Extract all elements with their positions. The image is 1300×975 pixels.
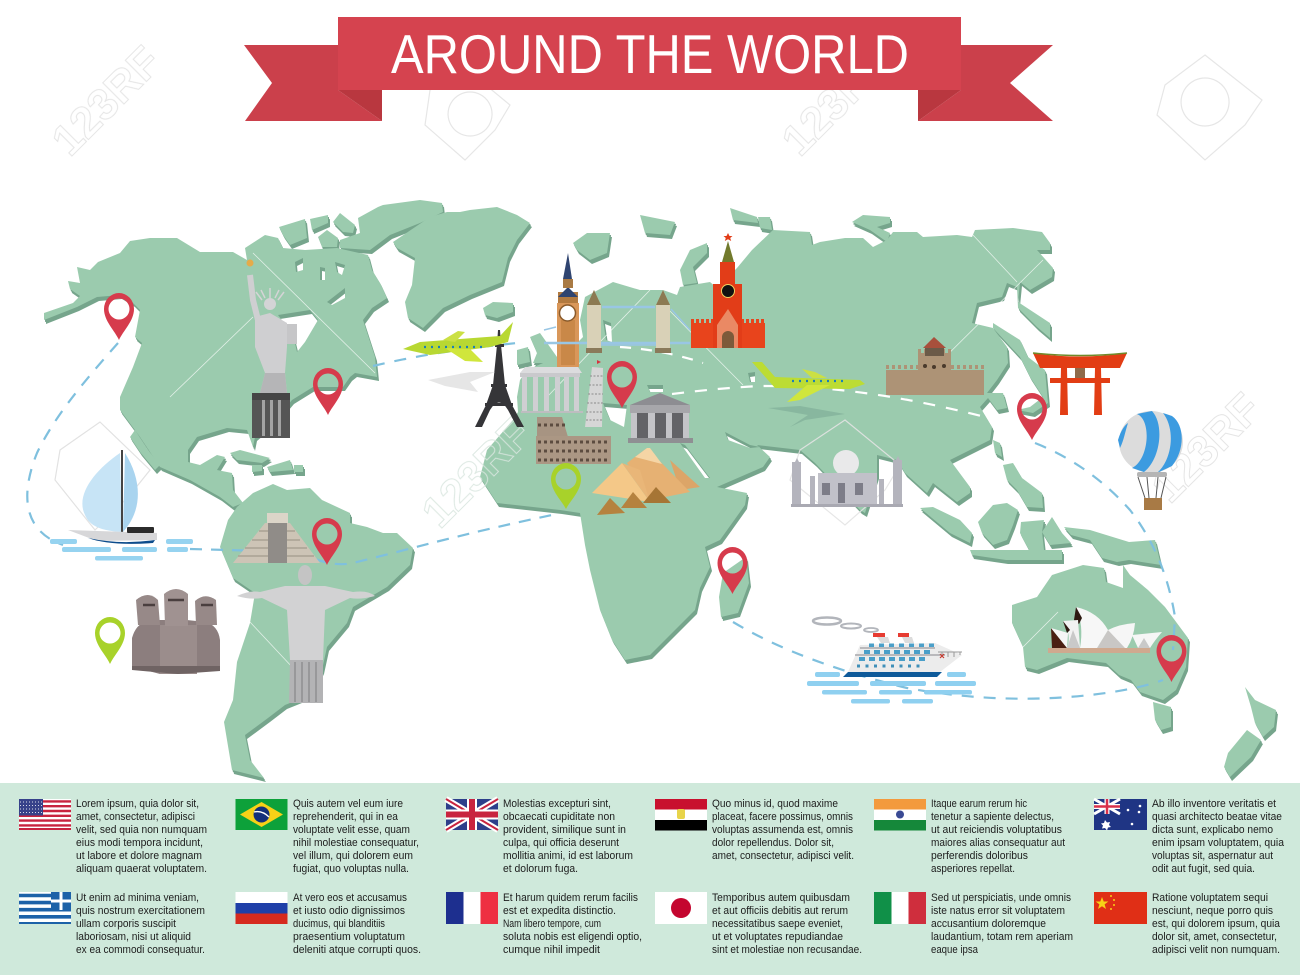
landmark: Greek temple	[628, 393, 693, 443]
text: USA	[76, 798, 207, 875]
text: France: cumque nihil impedit	[503, 944, 600, 956]
text: Australia: odit aut fugit, sed quia.	[1152, 863, 1255, 875]
land: North America	[44, 235, 387, 507]
title text: AROUND THE WORLD	[391, 23, 909, 85]
text: UK: Molestias excepturi sint,	[503, 798, 611, 810]
land: Tasmania	[1153, 702, 1171, 730]
watermarks: 123RF	[772, 37, 900, 165]
cruise ship	[813, 618, 962, 677]
flag: Brazil	[236, 799, 288, 830]
airplane over the Atlantic	[403, 322, 513, 392]
text: Italy: iste natus error sit voluptatem	[931, 905, 1065, 917]
text: USA: eius modi tempora incidunt,	[76, 837, 203, 849]
pin: New York	[313, 368, 343, 415]
text: India	[931, 798, 1065, 875]
land: Iceland	[483, 302, 513, 318]
text: China: est, qui dolorem ipsum, quia	[1152, 918, 1280, 930]
pin: Alaska	[104, 293, 134, 340]
text: China: nesciunt, neque porro quis	[1152, 905, 1273, 917]
pin: Brazil	[312, 518, 342, 565]
land: Indonesia and New Guinea	[920, 503, 1161, 565]
pin: Madagascar	[718, 547, 748, 594]
text: Egypt: amet, consectetur, adipisci velit.	[712, 850, 854, 862]
ribbon main band	[338, 17, 961, 90]
pin: Japan	[1017, 393, 1047, 440]
text: Brazil: nihil molestiae consequatur,	[293, 837, 419, 849]
text: Brazil: Quis autem vel eum iure	[293, 798, 403, 810]
text: Italy	[931, 892, 1073, 956]
text: Japan	[712, 892, 862, 956]
text: Japan: et aut officiis debitis aut rerum	[712, 905, 848, 917]
sailboat	[68, 450, 157, 544]
landmark: Kremlin Spasskaya tower	[691, 233, 765, 348]
text: Brazil: reprehenderit, qui in ea	[293, 811, 398, 823]
text: India: tenetur a sapiente delectus,	[931, 811, 1054, 823]
panel: country descriptions	[0, 783, 1300, 975]
text: Russia: At vero eos et accusamus	[293, 892, 407, 904]
flag: Russia	[236, 892, 288, 924]
landmark: Easter Island moai	[132, 589, 220, 674]
text: Russia: et iusto odio dignissimos	[293, 905, 405, 917]
text: Russia: deleniti atque corrupti quos.	[293, 944, 421, 956]
text: Brazil: fugiat, quo voluptas nulla.	[293, 863, 409, 875]
flag: Australia	[1094, 799, 1147, 830]
text: USA: Lorem ipsum, quia dolor sit,	[76, 798, 199, 810]
flag: Italy	[874, 892, 926, 924]
text: Egypt	[712, 798, 854, 862]
text: Japan: necessitatibus saepe eveniet,	[712, 918, 843, 930]
text: China	[1152, 892, 1280, 956]
land: Africa and Eurasia	[480, 228, 1053, 660]
pin: Easter Island	[95, 617, 125, 664]
landmark: Chichen Itza pyramid	[233, 513, 320, 563]
text: France: Nam libero tempore, cum	[503, 918, 601, 930]
text: Australia: voluptas sit, aspernatur aut	[1152, 850, 1273, 862]
flag: USA	[19, 799, 71, 830]
landmark: Colosseum	[536, 417, 611, 464]
text: Greece: Ut enim ad minima veniam,	[76, 892, 199, 904]
text: Italy: Sed ut perspiciatis, unde omnis	[931, 892, 1071, 904]
text: Australia: Ab illo inventore veritatis et	[1152, 798, 1276, 810]
text: Australia	[1152, 798, 1284, 875]
land: Arctic islands of Eurasia	[573, 208, 890, 285]
flag: Greece	[19, 892, 71, 924]
land: Australia	[1012, 565, 1188, 700]
text: Greece: ullam corporis suscipit	[76, 918, 176, 930]
landmark: Statue of Liberty	[246, 260, 297, 438]
text: Australia: quasi architecto beatae vitae	[1152, 811, 1282, 823]
text: Egypt: dolor repellendus. Dolor sit,	[712, 837, 834, 849]
landmark: Brandenburg Gate	[520, 367, 583, 413]
landmark: Tower Bridge	[544, 290, 690, 353]
pin: West Africa	[551, 463, 581, 509]
text: USA: amet, consectetur, adipisci	[76, 811, 195, 823]
text: China: Ratione voluptatem sequi	[1152, 892, 1268, 904]
route: dashed path sailboat via South America to Africa	[190, 515, 552, 564]
text: France: est et expedita distinctio.	[503, 905, 616, 917]
landmark: Taj Mahal	[791, 450, 903, 507]
route: dashed path Alaska to sailboat	[27, 343, 118, 545]
route: dashed path Japan to Australia	[1035, 443, 1175, 650]
text: UK: et dolorum fuga.	[503, 863, 578, 875]
route: dashed white path across Europe	[620, 347, 703, 363]
text: USA: aliquam quaerat voluptatem.	[76, 863, 207, 875]
landmark: Sydney Opera House	[1048, 607, 1162, 653]
text: Egypt: voluptas assumenda est, omnis	[712, 824, 853, 836]
flag: Egypt	[655, 799, 707, 830]
route: dashed path Madagascar to Australia	[733, 622, 1163, 699]
text: Greece: quis nostrum exercitationem	[76, 905, 205, 917]
watermarks: 123RF	[42, 37, 170, 165]
text: Italy: eaque ipsa	[931, 944, 978, 956]
text: Australia: dicta sunt, explicabo nemo	[1152, 824, 1273, 836]
waves under cruise ship	[807, 672, 976, 704]
text: USA: ut labore et dolore magnam	[76, 850, 202, 862]
text: Brazil: voluptate velit esse, quam	[293, 824, 410, 836]
text: India: perferendis doloribus	[931, 850, 1028, 862]
text: Italy: laudantium, totam rem aperiam	[931, 931, 1073, 943]
waves under sailboat	[50, 539, 193, 560]
airplane over Asia	[752, 362, 865, 427]
land: Arctic islands of Canada	[279, 200, 443, 250]
text: India: asperiores repellat.	[931, 863, 1015, 875]
land: Baja California	[130, 430, 160, 470]
text: Japan: ut et voluptates repudiandae	[712, 931, 843, 943]
text: China: dolor sit, amet, consectetur,	[1152, 931, 1277, 943]
flag: China	[1094, 892, 1147, 924]
text: France: Et harum quidem rerum facilis	[503, 892, 638, 904]
text: Greece: laboriosam, nisi ut aliquid	[76, 931, 191, 943]
text: India: Itaque earum rerum hic	[931, 798, 1028, 810]
landmark: Great Wall of China	[886, 337, 984, 395]
text: UK: mollitia animi, id est laborum	[503, 850, 633, 862]
route: dashed path across the Atlantic	[373, 343, 517, 366]
landmark: pyramids of Giza	[592, 448, 700, 515]
route: dashed white path across Asia	[672, 386, 985, 417]
text: Russia: praesentium voluptatum	[293, 931, 405, 943]
text: Japan: sint et molestiae non recusandae.	[712, 944, 862, 956]
watermarks: 123RF	[1142, 384, 1270, 512]
landmark: torii gate	[1033, 353, 1127, 415]
text: Italy: accusantium doloremque	[931, 918, 1046, 930]
watermarks: 123RF	[412, 409, 540, 537]
flag: UK	[446, 799, 498, 830]
text: Egypt: Quo minus id, quod maxime	[712, 798, 838, 810]
text: Brazil: vel illum, qui dolorem eum	[293, 850, 413, 862]
landmark: Christ the Redeemer	[237, 565, 375, 703]
text: Russia: ducimus, qui blanditiis	[293, 918, 385, 930]
text: Japan: Temporibus autem quibusdam	[712, 892, 850, 904]
land: Greenland	[393, 207, 530, 328]
land: Madagascar	[719, 557, 749, 617]
text: France	[503, 892, 642, 956]
land: South America	[220, 484, 413, 778]
text: Russia	[293, 892, 421, 956]
text: Australia: enim ipsam voluptatem, quia	[1152, 837, 1284, 849]
text: UK	[503, 798, 633, 875]
flag: France	[446, 892, 498, 924]
land: Taiwan and Philippines	[993, 440, 1043, 508]
text: UK: obcaecati cupiditate non	[503, 811, 615, 823]
ribbon right tail	[918, 45, 1053, 121]
text: France: soluta nobis est eligendi optio,	[503, 931, 642, 943]
pin: Australia	[1156, 635, 1186, 682]
world map	[44, 200, 1276, 778]
text: Greece	[76, 892, 205, 956]
text: UK: provident, similique sunt in	[503, 824, 626, 836]
title ribbon	[244, 17, 1053, 121]
flag: Japan	[655, 892, 707, 924]
text: India: ut aut reiciendis voluptatibus	[931, 824, 1062, 836]
text: UK: culpa, qui officia deserunt	[503, 837, 619, 849]
land: Caribbean islands	[230, 450, 303, 472]
text: Egypt: placeat, facere possimus, omnis	[712, 811, 853, 823]
hot-air balloon	[1118, 411, 1183, 510]
landmark: Big Ben	[557, 253, 579, 367]
text: Greece: ex ea commodi consequatur.	[76, 944, 205, 956]
ribbon fold shadows	[338, 90, 961, 121]
land: Japan	[993, 323, 1048, 413]
landmark: Eiffel Tower	[475, 330, 524, 427]
land: British Isles	[517, 333, 557, 365]
ribbon left tail	[244, 45, 382, 121]
location pins	[95, 293, 1186, 682]
text: Brazil	[293, 798, 419, 875]
text: China: adipisci velit non numquam.	[1152, 944, 1280, 956]
landmark: Leaning Tower of Pisa	[585, 360, 603, 427]
land: New Zealand	[1224, 687, 1276, 777]
text: USA: velit, sed quia non numquam	[76, 824, 207, 836]
flag: India	[874, 799, 926, 830]
pin: Europe	[607, 361, 637, 408]
text: India: maiores alias consequatur aut	[931, 837, 1065, 849]
